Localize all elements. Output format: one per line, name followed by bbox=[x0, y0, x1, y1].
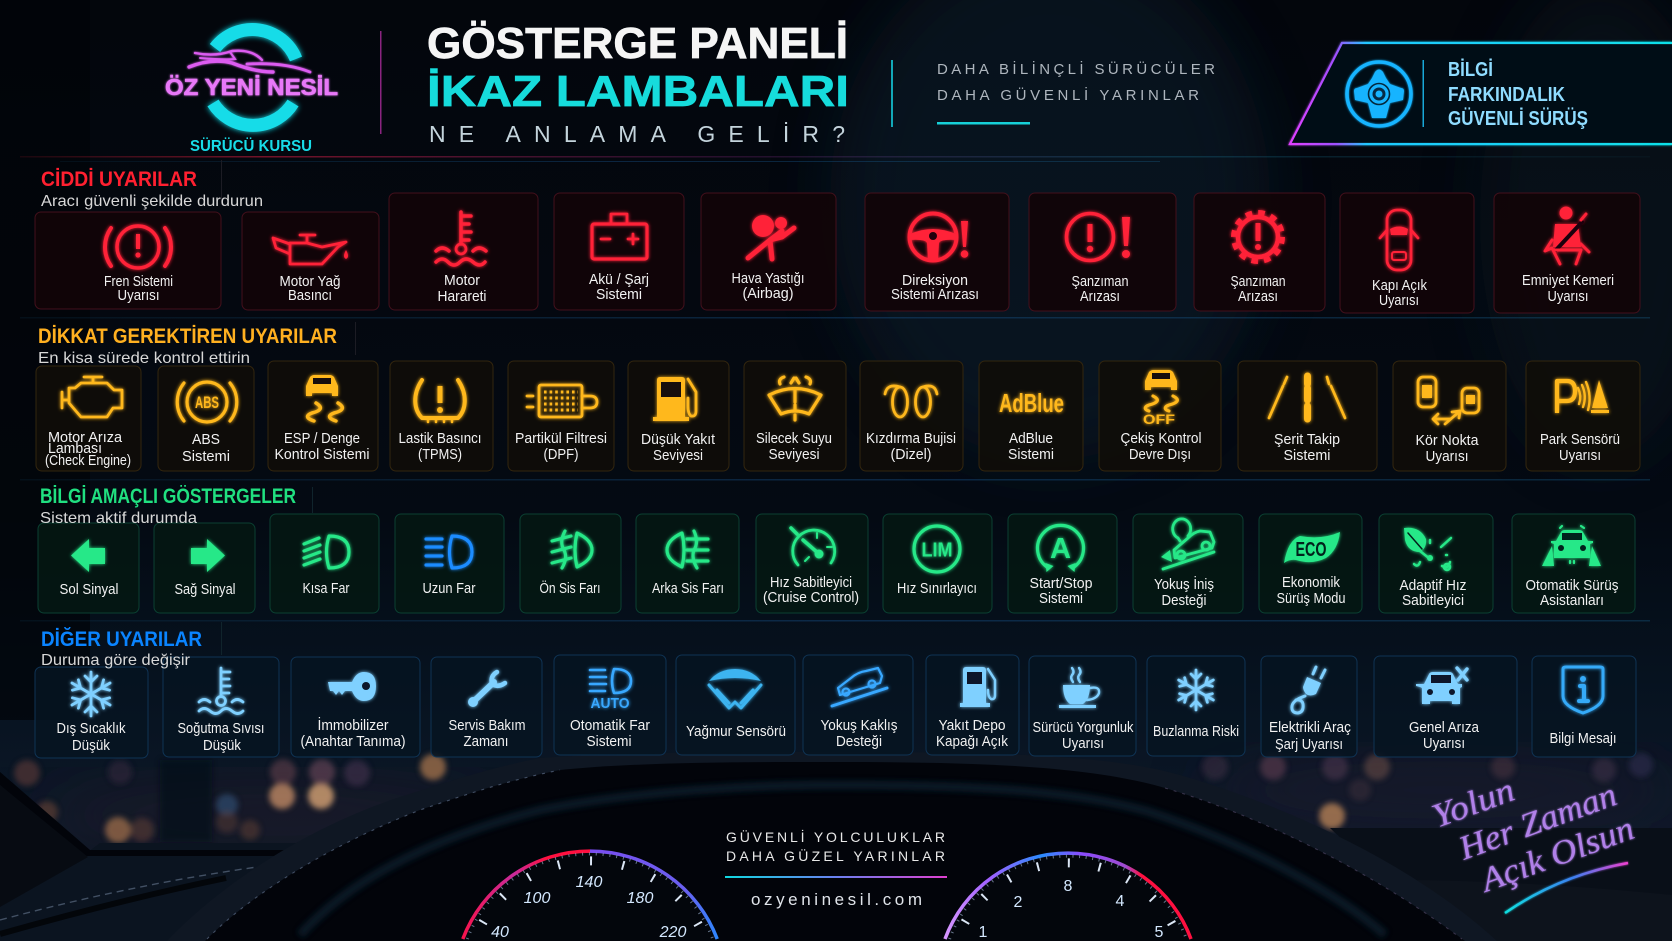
speedometer left: 40 bbox=[491, 924, 509, 941]
slogan bbox=[937, 60, 1215, 124]
card: esp: Kontrol Sistemi bbox=[274, 447, 370, 463]
card: servis bakım: Zamanı bbox=[464, 734, 508, 750]
card: emniyet kemeri: Emniyet Kemeri bbox=[1522, 273, 1614, 289]
card: hava yastığı: (Airbag) bbox=[742, 286, 794, 302]
icon: gear bbox=[1234, 213, 1282, 261]
card: şerit takip: Sistemi bbox=[1284, 448, 1330, 464]
icon: snowflake bbox=[69, 672, 113, 716]
card: esp bbox=[268, 361, 378, 471]
card: genel arıza: Uyarısı bbox=[1423, 736, 1465, 752]
tachometer right: 1 bbox=[979, 924, 988, 941]
card: direksiyon bbox=[865, 193, 1009, 311]
card: kısa far bbox=[270, 514, 379, 613]
card: yakıt depo: Kapağı Açık bbox=[936, 734, 1009, 750]
logo ring bbox=[213, 29, 296, 125]
card: sürücü yorgunluk bbox=[1029, 656, 1136, 756]
icon: shield info bbox=[1563, 667, 1603, 713]
card: ön sis bbox=[520, 514, 621, 613]
card: otomatik sürüş: Otomatik Sürüş bbox=[1526, 578, 1618, 594]
neon script slogan bbox=[1427, 772, 1639, 913]
icon: limiter: LIM bbox=[922, 540, 952, 562]
icon: brake bbox=[105, 226, 171, 268]
card: motor yağ: Motor Yağ bbox=[280, 274, 340, 290]
card: lastik basıncı: Lastik Basıncı bbox=[398, 431, 482, 447]
card: park sensörü bbox=[1526, 361, 1640, 471]
card: yağmur sensörü bbox=[676, 655, 795, 755]
card: çekiş kontrol: Devre Dışı bbox=[1129, 447, 1191, 463]
card: motor hararet bbox=[389, 193, 538, 310]
card: otomatik sürüş bbox=[1512, 514, 1635, 613]
card: elektrikli araç: Şarj Uyarısı bbox=[1275, 737, 1343, 753]
card: ön sis: Ön Sis Farı bbox=[540, 579, 600, 597]
card: hız sınırlayıcı: Hız Sınırlayıcı bbox=[897, 581, 977, 597]
icon: traction off: OFF bbox=[1143, 411, 1176, 427]
card: otomatik sürüş: Asistanları bbox=[1540, 593, 1604, 609]
badge text: FARKINDALIK bbox=[1448, 84, 1565, 106]
card: dpf: Partikül Filtresi bbox=[515, 431, 607, 447]
icon: oil can bbox=[273, 235, 348, 264]
icon: engine bbox=[62, 377, 122, 417]
header logo bbox=[165, 29, 338, 155]
title line 3: NE ANLAMA GELİR? bbox=[429, 121, 845, 147]
card: çekiş kontrol: Çekiş Kontrol bbox=[1120, 431, 1202, 447]
icon: low beam bbox=[304, 536, 349, 568]
card: soğutma sıvısı: Düşük bbox=[203, 738, 242, 754]
card: sağ sinyal: Sağ Sinyal bbox=[174, 582, 236, 598]
section heading: BİLGİ AMAÇLI GÖSTERGELER bbox=[40, 485, 296, 508]
card: kızdırma bujisi: Kızdırma Bujisi bbox=[866, 431, 956, 447]
icon: coffee cup bbox=[1059, 668, 1099, 708]
card: kapı açık bbox=[1340, 193, 1474, 313]
card: akü şarj bbox=[554, 193, 684, 310]
card: yokuş kaklış bbox=[803, 655, 913, 755]
icon: steering warning bbox=[910, 214, 968, 260]
icon: washer bbox=[769, 377, 821, 420]
slogan: DAHA GÜVENLİ YARINLAR bbox=[937, 86, 1199, 104]
logo name: ÖZ YENİ NESİL bbox=[165, 74, 338, 100]
card: park sensörü: Uyarısı bbox=[1559, 448, 1601, 464]
card: silecek suyu: Seviyesi bbox=[768, 447, 820, 463]
footer message bbox=[725, 828, 947, 909]
speedometer left: 220 bbox=[659, 924, 686, 941]
icon: right arrow bbox=[191, 539, 225, 572]
icon: airbag bbox=[748, 215, 794, 259]
card: soğutma sıvısı bbox=[163, 657, 279, 757]
neon script slogan: Yolun bbox=[1427, 772, 1520, 836]
slogan: DAHA BİLİNÇLİ SÜRÜCÜLER bbox=[937, 60, 1215, 78]
icon: lane bbox=[1269, 376, 1345, 419]
card: kör nokta: Kör Nokta bbox=[1416, 433, 1479, 449]
card: adblue: AdBlue bbox=[1009, 431, 1053, 447]
speedometer left: 100 bbox=[524, 890, 550, 907]
card: fren sistemi bbox=[35, 212, 221, 309]
card: hız sınırlayıcı bbox=[883, 514, 992, 613]
icon: battery bbox=[592, 214, 647, 259]
logo subtitle: SÜRÜCÜ KURSU bbox=[190, 136, 312, 155]
icon: glow plug bbox=[885, 386, 937, 417]
section subtitle: Aracı güvenli şekilde durdurun bbox=[41, 193, 263, 210]
logo car swoosh bbox=[189, 51, 310, 72]
card: düşük yakıt bbox=[628, 361, 729, 471]
card: ekonomik bbox=[1259, 514, 1362, 613]
card: akü şarj: Akü / Şarj bbox=[589, 272, 649, 288]
icon: circle exclamation bbox=[1066, 214, 1130, 260]
card: motor arıza bbox=[36, 366, 141, 471]
card: servis bakım bbox=[431, 657, 542, 757]
card: otomatik far: Sistemi bbox=[586, 734, 632, 750]
card: silecek suyu bbox=[744, 361, 846, 471]
card: kısa far: Kısa Far bbox=[302, 581, 350, 597]
card: düşük yakıt: Düşük Yakıt bbox=[641, 432, 715, 448]
card: start stop bbox=[1008, 514, 1117, 613]
icon: abs: ABS bbox=[195, 393, 219, 412]
card: yakıt depo bbox=[926, 655, 1019, 755]
icon: wrench bbox=[470, 672, 505, 706]
icon: start stop: A bbox=[1050, 533, 1071, 565]
icon: seat belt bbox=[1545, 206, 1589, 264]
card: yokuş kaklış: Yokuş Kaklış bbox=[820, 718, 898, 734]
card: bilgi mesajı: Bilgi Mesajı bbox=[1550, 731, 1616, 747]
icon: tpms bbox=[415, 380, 465, 422]
card: elektrikli araç bbox=[1261, 656, 1357, 757]
speedometer left bbox=[462, 851, 718, 941]
card: abs: ABS bbox=[192, 432, 220, 448]
card: şanzıman 2: Şanzıman bbox=[1230, 274, 1286, 290]
card: hava yastığı: Hava Yastığı bbox=[732, 271, 804, 287]
card: kapı açık: Kapı Açık bbox=[1372, 278, 1428, 294]
icon: particle filter bbox=[527, 385, 597, 417]
section subtitle: Sistem aktif durumda bbox=[40, 510, 197, 527]
card: dpf: (DPF) bbox=[544, 447, 578, 463]
card: kızdırma bujisi bbox=[860, 361, 963, 471]
card: adaptif hız bbox=[1379, 514, 1493, 613]
card: otomatik far bbox=[554, 655, 666, 755]
icon: ev plug bbox=[1292, 667, 1325, 713]
card: şanzıman 1 bbox=[1029, 193, 1176, 311]
icon: coolant bbox=[199, 668, 243, 714]
card: uzun far: Uzun Far bbox=[422, 581, 476, 597]
card: adaptif hız: Sabitleyici bbox=[1402, 593, 1464, 609]
card: motor arıza: (Check Engine) bbox=[45, 453, 131, 469]
card: lastik basıncı bbox=[390, 361, 493, 471]
section heading: DİKKAT GEREKTİREN UYARILAR bbox=[38, 325, 337, 348]
badge text: BİLGİ bbox=[1448, 58, 1493, 81]
card: kör nokta bbox=[1393, 361, 1506, 471]
speedometer left: 140 bbox=[576, 874, 602, 891]
icon: steering wheel bbox=[1347, 62, 1411, 126]
section subtitle: Duruma göre değişir bbox=[41, 652, 191, 669]
icon: rain sensor bbox=[709, 669, 761, 708]
card: lastik basıncı: (TPMS) bbox=[418, 447, 462, 463]
tachometer right: 2 bbox=[1014, 894, 1023, 911]
card: adaptif hız: Adaptif Hız bbox=[1400, 578, 1466, 594]
card: elektrikli araç: Elektrikli Araç bbox=[1269, 720, 1351, 736]
card: start stop: Start/Stop bbox=[1030, 576, 1092, 592]
card: esp: ESP / Denge bbox=[284, 431, 360, 447]
tachometer right bbox=[944, 852, 1192, 941]
card: adblue bbox=[979, 361, 1083, 471]
card: fren sistemi: Fren Sistemi bbox=[104, 274, 173, 290]
steering wheel bbox=[167, 752, 1497, 941]
card: dış sıcaklık: Düşük bbox=[72, 738, 111, 754]
card: abs bbox=[158, 366, 254, 471]
card: hız sabitleyici: (Cruise Control) bbox=[763, 590, 859, 606]
card: şanzıman 2: Arızası bbox=[1238, 289, 1278, 305]
card: genel arıza bbox=[1374, 656, 1517, 757]
card: emniyet kemeri bbox=[1494, 193, 1640, 313]
card: düşük yakıt: Seviyesi bbox=[653, 448, 703, 464]
card: motor hararet: Harareti bbox=[438, 289, 486, 305]
icon: parking sensor bbox=[1557, 380, 1609, 413]
card: dpf bbox=[508, 361, 614, 471]
card: yakıt depo: Yakıt Depo bbox=[938, 718, 1006, 734]
card: şerit takip: Şerit Takip bbox=[1274, 432, 1340, 448]
card: motor yağ: Basıncı bbox=[288, 288, 332, 304]
badge text: GÜVENLİ SÜRÜŞ bbox=[1448, 107, 1588, 130]
icon: car wrench bbox=[1416, 668, 1467, 704]
neon script slogan: Her Zaman bbox=[1453, 776, 1622, 868]
tachometer right: 5 bbox=[1155, 924, 1164, 941]
panel: dikkat gerektiren uyarılar bbox=[36, 325, 1640, 471]
card: hava yastığı bbox=[701, 193, 836, 310]
card: direksiyon: Sistemi Arızası bbox=[891, 287, 979, 303]
card: yokuş iniş bbox=[1133, 514, 1243, 613]
card: immobilizer bbox=[291, 657, 420, 757]
title line 1: GÖSTERGE PANELİ bbox=[427, 19, 848, 68]
panel: ciddi uyarılar bbox=[35, 168, 1640, 313]
main title bbox=[427, 19, 849, 147]
section subtitle: En kisa sürede kontrol ettirin bbox=[38, 350, 250, 367]
card: hız sabitleyici bbox=[756, 514, 868, 613]
card: direksiyon: Direksiyon bbox=[902, 273, 968, 289]
tachometer right: 8 bbox=[1064, 878, 1073, 895]
icon: hill descent bbox=[1161, 519, 1214, 569]
card: motor yağ bbox=[242, 212, 379, 310]
icon: temperature bbox=[436, 212, 486, 265]
card: ekonomik: Ekonomik bbox=[1282, 575, 1341, 591]
neon script slogan: Açık Olsun bbox=[1474, 810, 1639, 900]
card: servis bakım: Servis Bakım bbox=[448, 718, 526, 734]
card: buzlanma: Buzlanma Riski bbox=[1153, 724, 1239, 740]
panel: bilgi amaçlı göstergeler bbox=[38, 485, 1635, 613]
icon: adaptive cruise leaf bbox=[1404, 528, 1451, 570]
card: kapı açık: Uyarısı bbox=[1379, 293, 1419, 309]
card: motor arıza: Lambası bbox=[48, 441, 102, 457]
icon: car door bbox=[1380, 210, 1418, 270]
footer message: DAHA GÜZEL YARINLAR bbox=[726, 847, 945, 864]
icon: eco leaf: ECO bbox=[1296, 539, 1326, 561]
card: sol sinyal bbox=[38, 523, 139, 613]
card: şanzıman 2 bbox=[1194, 193, 1325, 311]
icon: auto driving bbox=[1542, 526, 1601, 566]
icon: fuel cap bbox=[960, 667, 995, 707]
card: yokuş iniş: Yokuş İniş bbox=[1154, 575, 1214, 593]
icon: left arrow bbox=[71, 539, 105, 572]
card: akü şarj: Sistemi bbox=[596, 287, 642, 303]
card: immobilizer: İmmobilizer bbox=[318, 716, 389, 734]
card: arka sis bbox=[636, 514, 739, 613]
icon: rear fog bbox=[667, 531, 708, 568]
card: dış sıcaklık bbox=[35, 667, 148, 758]
panel: diğer uyarılar bbox=[35, 627, 1636, 758]
card: şerit takip bbox=[1238, 361, 1377, 471]
card: hız sabitleyici: Hız Sabitleyici bbox=[770, 575, 852, 591]
icon: adblue: AdBlue bbox=[999, 388, 1064, 418]
card: çekiş kontrol bbox=[1099, 361, 1221, 471]
card: motor arıza: Motor Arıza bbox=[48, 430, 123, 446]
card: buzlanma bbox=[1147, 656, 1245, 756]
card: abs: Sistemi bbox=[182, 449, 230, 465]
card: park sensörü: Park Sensörü bbox=[1540, 432, 1620, 448]
card: fren sistemi: Uyarısı bbox=[118, 288, 160, 304]
card: yağmur sensörü: Yağmur Sensörü bbox=[686, 724, 786, 740]
card: arka sis: Arka Sis Farı bbox=[652, 581, 724, 597]
icon: auto headlight: AUTO bbox=[590, 695, 630, 712]
icon: fuel pump bbox=[653, 377, 696, 421]
card: yokuş iniş: Desteği bbox=[1162, 593, 1206, 609]
section heading: CİDDİ UYARILAR bbox=[41, 168, 197, 191]
card: emniyet kemeri: Uyarısı bbox=[1548, 289, 1588, 305]
card: sürücü yorgunluk: Uyarısı bbox=[1062, 736, 1104, 752]
card: motor hararet: Motor bbox=[444, 273, 480, 289]
card: genel arıza: Genel Arıza bbox=[1409, 720, 1480, 736]
section heading: DİĞER UYARILAR bbox=[41, 627, 202, 651]
card: soğutma sıvısı: Soğutma Sıvısı bbox=[178, 721, 264, 737]
card: adblue: Sistemi bbox=[1008, 447, 1054, 463]
card: sağ sinyal bbox=[154, 523, 255, 613]
icon: front fog bbox=[552, 531, 592, 568]
icon: stability skid bbox=[306, 375, 342, 421]
icon: high beam bbox=[426, 536, 472, 568]
card: bilgi mesajı bbox=[1532, 656, 1636, 757]
icon: hill start bbox=[832, 668, 887, 706]
icon: blind spot bbox=[1418, 377, 1479, 424]
icon: cruise bbox=[791, 528, 835, 565]
card: şanzıman 1: Arızası bbox=[1080, 289, 1120, 305]
card: dış sıcaklık: Dış Sıcaklık bbox=[56, 721, 126, 737]
footer message: ozyeninesil.com bbox=[751, 890, 922, 909]
icon: key bbox=[328, 672, 376, 701]
card: sol sinyal: Sol Sinyal bbox=[60, 582, 118, 598]
footer message: GÜVENLİ YOLCULUKLAR bbox=[726, 828, 945, 845]
speedometer left: 180 bbox=[627, 890, 653, 907]
card: kör nokta: Uyarısı bbox=[1426, 449, 1468, 465]
card: şanzıman 1: Şanzıman bbox=[1072, 274, 1128, 290]
icon: ice snowflake bbox=[1176, 670, 1216, 710]
tachometer right: 4 bbox=[1116, 893, 1125, 910]
card: start stop: Sistemi bbox=[1039, 591, 1083, 607]
card: otomatik far: Otomatik Far bbox=[570, 718, 650, 734]
card: immobilizer: (Anahtar Tanıma) bbox=[300, 734, 406, 750]
card: kızdırma bujisi: (Dizel) bbox=[890, 447, 932, 463]
card: ekonomik: Sürüş Modu bbox=[1276, 591, 1346, 607]
badge bbox=[1290, 43, 1672, 144]
badge text bbox=[1448, 58, 1588, 130]
card: silecek suyu: Silecek Suyu bbox=[756, 431, 832, 447]
card: sürücü yorgunluk: Sürücü Yorgunluk bbox=[1032, 720, 1134, 736]
card: yokuş kaklış: Desteği bbox=[836, 734, 882, 750]
card: uzun far bbox=[395, 514, 504, 613]
title line 2: İKAZ LAMBALARI bbox=[427, 67, 849, 116]
